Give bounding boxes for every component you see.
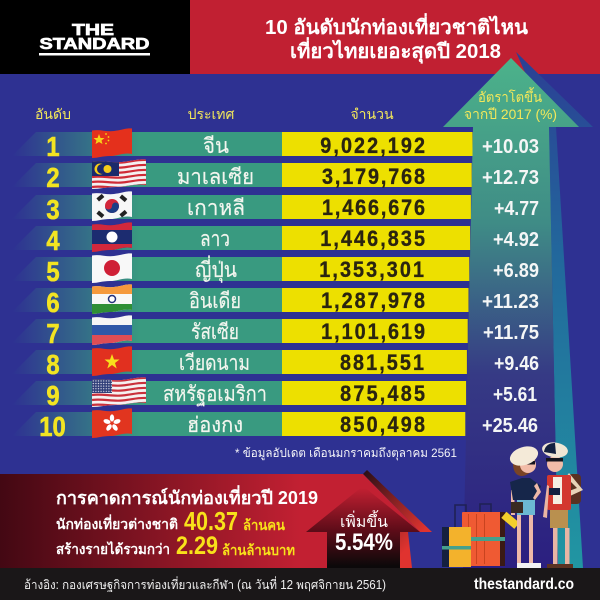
row 1: China: จีน <box>203 135 229 158</box>
forecast heading: การคาดการณ์นักท่องเที่ยวปี 2019 <box>56 485 318 508</box>
row 4: Laos: ลาว <box>200 228 230 251</box>
column headings: จากปี 2017 (%) <box>464 106 557 122</box>
forecast visitors line <box>56 506 285 536</box>
footnote: * ข้อมูลอัปเดต เดือนมกราคมถึงตุลาคม 2561 <box>235 446 457 461</box>
header: logo panel: THE <box>72 22 114 39</box>
row 3: South Korea: 1,466,676 <box>322 196 425 220</box>
row 7: Russia: รัสเซีย <box>191 321 239 344</box>
row 3: South Korea: 3 <box>46 193 60 225</box>
column headings: ประเทศ <box>188 106 235 122</box>
row 7: Russia <box>22 315 538 345</box>
row 1: China: 9,022,192 <box>320 134 425 158</box>
row 3: South Korea: เกาหลี <box>187 197 245 220</box>
flag: India <box>92 284 132 315</box>
forecast revenue line <box>56 532 295 560</box>
column headings: จำนวน <box>350 106 394 122</box>
row 9: United States: สหรัฐอเมริกา <box>163 383 267 406</box>
row 9: United States: 875,485 <box>340 382 425 406</box>
row 5: Japan: 5 <box>46 255 60 287</box>
row 2: Malaysia: 2 <box>46 161 60 193</box>
flag: South Korea <box>92 191 132 222</box>
row 2: Malaysia: 3,179,768 <box>322 165 425 189</box>
flag: China <box>92 128 132 159</box>
flag: Russia <box>92 315 132 346</box>
row 1: China: 1 <box>46 130 60 162</box>
row 3: South Korea: +4.77 <box>494 198 539 220</box>
header: title panel <box>190 0 600 74</box>
row 7: Russia: +11.75 <box>483 322 539 344</box>
forecast arrow with increase: เพิ่มขึ้น <box>340 510 388 531</box>
header: title panel: 10 อันดับนักท่องเที่ยวชาติไหน <box>265 12 528 39</box>
column headings <box>35 87 557 122</box>
flag: Hong Kong <box>92 408 132 439</box>
row 10: Hong Kong: 10 <box>39 410 66 442</box>
footer bar <box>0 568 600 600</box>
row 9: United States: 9 <box>46 379 60 411</box>
icon: man traveller <box>541 441 583 569</box>
row 5: Japan <box>22 253 538 283</box>
row 8: Vietnam: 8 <box>46 348 60 380</box>
row 3: South Korea <box>22 191 538 221</box>
forecast revenue line: ล้านล้านบาท <box>222 542 295 558</box>
row 8: Vietnam: +9.46 <box>494 353 539 375</box>
website: thestandard.co <box>474 576 574 593</box>
row 4: Laos: 1,446,835 <box>320 227 425 251</box>
row 2: Malaysia: +12.73 <box>482 167 539 189</box>
forecast visitors line: 40.37 <box>184 506 238 536</box>
row 10: Hong Kong: 850,498 <box>340 413 425 437</box>
row 10: Hong Kong: ฮ่องกง <box>187 414 243 437</box>
icon: luggage <box>442 504 519 567</box>
row 6: India <box>22 284 538 314</box>
forecast banner <box>0 470 432 568</box>
forecast arrow with increase <box>306 486 420 568</box>
row 6: India: +11.23 <box>482 291 539 313</box>
row 5: Japan: +6.89 <box>493 260 539 282</box>
header: logo panel: STANDARD <box>40 36 150 53</box>
row 2: Malaysia: มาเลเซีย <box>177 166 254 189</box>
row 1: China: +10.03 <box>482 136 539 158</box>
header: title panel: เที่ยวไทยเยอะสุดปี 2018 <box>290 36 501 64</box>
row 2: Malaysia <box>22 159 538 189</box>
row 6: India: 6 <box>46 286 60 318</box>
flag: United States <box>92 377 146 408</box>
row 7: Russia: 7 <box>46 317 60 349</box>
source note: อ้างอิง: กองเศรษฐกิจการท่องเที่ยวและกีฬา (ณ วันที่ 12 พฤศจิกายน 2561) <box>24 576 386 592</box>
column headings: อันดับ <box>35 106 71 122</box>
row 4: Laos: +4.92 <box>493 229 539 251</box>
flag: Vietnam <box>92 346 132 377</box>
row 7: Russia: 1,101,619 <box>321 320 425 344</box>
forecast revenue line: สร้างรายได้รวมกว่า <box>56 540 170 557</box>
flag: Malaysia <box>92 159 146 190</box>
row 4: Laos <box>22 222 538 252</box>
row 8: Vietnam: 881,551 <box>340 351 424 375</box>
row 6: India: อินเดีย <box>189 290 241 313</box>
header: logo panel <box>0 0 190 74</box>
row 10: Hong Kong: +25.46 <box>482 415 538 437</box>
row 5: Japan: 1,353,301 <box>319 258 424 282</box>
row 5: Japan: ญี่ปุ่น <box>195 255 237 283</box>
column headings: อัตราโตขึ้น <box>478 87 542 105</box>
row 8: Vietnam: เวียดนาม <box>179 352 250 375</box>
flag: Laos <box>92 222 132 253</box>
row 6: India: 1,287,978 <box>321 289 425 313</box>
forecast arrow with increase: 5.54% <box>335 529 393 556</box>
forecast visitors line: ล้านคน <box>243 517 285 533</box>
flag: Japan <box>92 253 132 284</box>
row 8: Vietnam <box>22 346 538 376</box>
growth arrow <box>443 52 593 568</box>
row 9: United States <box>22 377 537 407</box>
row 4: Laos: 4 <box>46 224 60 256</box>
icon: woman traveller <box>507 443 541 569</box>
forecast revenue line: 2.29 <box>176 532 218 560</box>
row 1: China <box>22 128 538 158</box>
row 10: Hong Kong <box>22 408 538 438</box>
forecast visitors line: นักท่องเที่ยวต่างชาติ <box>56 514 178 532</box>
row 9: United States: +5.61 <box>493 384 537 406</box>
